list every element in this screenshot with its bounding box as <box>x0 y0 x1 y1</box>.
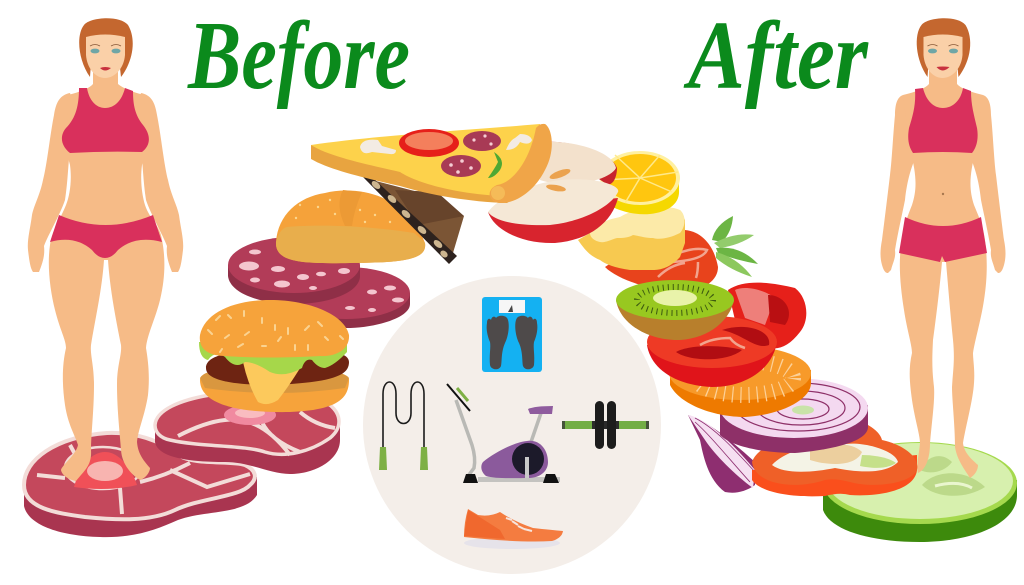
food: red onion slice <box>720 378 868 453</box>
figure: woman after <box>880 18 1006 478</box>
food: salami back slice <box>282 267 410 328</box>
food: kiwi slice <box>616 280 734 340</box>
title: Before: Before <box>187 2 410 110</box>
food: banana slices <box>578 207 685 270</box>
left arm <box>28 93 76 272</box>
crop top <box>908 88 978 153</box>
cheese <box>243 360 305 404</box>
salami topping 1 <box>463 131 501 151</box>
food: strawberry <box>605 216 758 292</box>
patty <box>206 351 349 385</box>
bottom bun <box>200 368 349 412</box>
tomato topping <box>399 129 459 157</box>
top bun <box>200 300 349 358</box>
mushroom topping 2 <box>506 134 532 150</box>
salami topping 2 <box>441 155 481 177</box>
navel <box>942 193 944 195</box>
head <box>917 18 970 78</box>
figure: woman before <box>28 18 183 481</box>
food: steak large <box>24 433 257 537</box>
left arm <box>880 95 920 273</box>
food: red pepper ring <box>752 423 917 496</box>
icon: jump rope <box>379 382 428 470</box>
food: carrot slice <box>669 346 811 417</box>
icon: ab roller <box>562 401 649 449</box>
food: tomato back slice <box>728 283 806 348</box>
right arm <box>135 93 183 272</box>
bra <box>62 88 149 153</box>
food: tomato front slice <box>647 316 777 387</box>
icon: running shoe <box>464 509 563 549</box>
food: hamburger <box>199 300 349 412</box>
green pepper topping <box>488 152 502 178</box>
food: steak small <box>155 394 340 474</box>
icon: bathroom scale <box>482 297 542 372</box>
title: After: After <box>683 2 869 110</box>
food: chocolate bar <box>363 177 464 264</box>
shorts <box>899 217 987 262</box>
food: pizza slice <box>311 124 552 203</box>
right arm <box>966 95 1006 273</box>
food: bread bun <box>276 190 425 263</box>
figure: cucumber stand <box>823 442 1017 542</box>
briefs <box>50 215 162 258</box>
body and legs <box>49 70 164 481</box>
food: salami front slice <box>228 237 360 304</box>
food: lemon slice <box>600 151 680 214</box>
leaves <box>712 216 758 277</box>
food: apple back half <box>540 142 617 184</box>
food: apple front half <box>488 179 618 243</box>
body and legs <box>900 70 987 478</box>
food: red onion half <box>688 415 755 493</box>
exercise circle panel <box>363 276 661 574</box>
mushroom topping 1 <box>360 140 396 154</box>
lettuce <box>199 342 347 374</box>
icon: exercise bike <box>447 384 560 483</box>
head <box>79 18 133 78</box>
